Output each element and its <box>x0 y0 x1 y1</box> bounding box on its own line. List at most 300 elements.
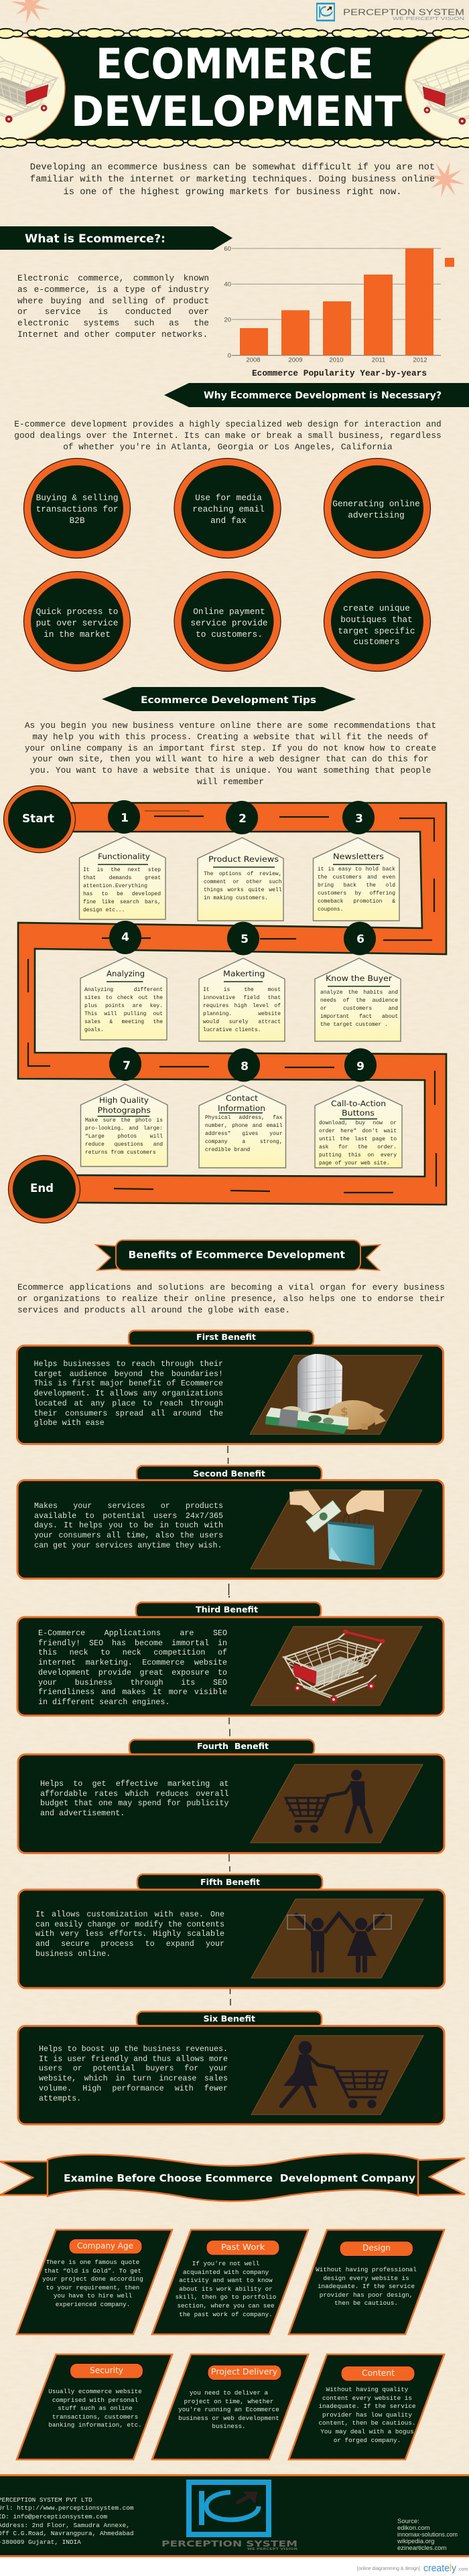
card: Analyzing: plus points are key. <box>84 1003 163 1009</box>
panel: Six Benefit: Helps to boost up the business revenues. <box>39 2044 228 2054</box>
card: Product Reviews: things works quite well <box>204 887 281 893</box>
card: Product Reviews: in making customers. <box>204 895 268 901</box>
pill: Project Delivery: Project Delivery <box>211 2367 277 2376</box>
panel: Fifth Benefit: can easily change or modify the contents <box>36 1920 224 1929</box>
card: Newsletters: it is easy to hold back <box>318 866 395 873</box>
creately credit <box>0 2557 469 2576</box>
icon: shopping cart <box>284 1629 385 1703</box>
pill: Security <box>70 2364 143 2378</box>
connector dashes <box>228 1446 230 2005</box>
panel: First Benefit: located at any place to reach through <box>34 1399 223 1408</box>
card: Newsletters: bring back the old <box>318 883 395 889</box>
x axis labels: 2009 <box>288 357 303 364</box>
panel: Third Benefit: friendly! SEO has become immortal in <box>38 1639 227 1648</box>
step numbers: 5 <box>241 933 249 946</box>
bars <box>240 248 433 356</box>
step numbers: 9 <box>356 1060 364 1073</box>
text: tips intro: will remember <box>197 777 264 787</box>
pill: Design <box>340 2241 413 2257</box>
circle: online payment <box>174 572 281 671</box>
footer contact text <box>0 2496 134 2546</box>
panel: Past Work: activity and want to know <box>179 2277 273 2284</box>
panel: Fourth Benefit: affordable rates which reduces overall <box>40 1789 229 1799</box>
card: Newsletters: coupons. <box>318 907 343 913</box>
panel: Company Age: that “Old is Gold”. To get <box>44 2267 141 2275</box>
decorative star top left <box>7 0 54 28</box>
text: why ecommerce: good dealings over the Internet. Its can make or break a small business, regardless <box>14 431 442 441</box>
card: Makerting: Makerting <box>223 969 265 978</box>
card: Analyzing: sales & meeting the <box>84 1019 163 1025</box>
road path <box>18 803 446 1205</box>
panel: Fifth Benefit: and secure process to expand your <box>36 1939 224 1949</box>
panel: Security: Usually ecommerce website <box>48 2388 142 2395</box>
card: Product Reviews: comment or other such <box>204 879 281 885</box>
panel: Fourth Benefit: Helps to get effective marketing at <box>40 1779 229 1789</box>
step numbers: 1 <box>121 812 129 825</box>
card: Product Reviews <box>198 838 283 921</box>
end node <box>8 1156 80 1223</box>
card: Analyzing: This will pulling out <box>84 1011 163 1017</box>
text: what is ecommerce: Electronic commerce, commonly known <box>17 273 209 283</box>
panel: Company Age: to your requirement, then <box>46 2284 139 2291</box>
text: tips intro: you. You want to have a website that is unique. You want something that people <box>29 765 431 775</box>
card: Call-to-Action Buttons: Call-to-Action <box>331 1099 386 1108</box>
card: Product Reviews: The options of review, <box>204 871 281 877</box>
bar chart: ecommerce popularity <box>224 245 454 378</box>
panel: Company Age: experienced company. <box>56 2301 130 2308</box>
creately credit: creately <box>423 2563 456 2574</box>
title text: DEVELOPMENT <box>71 87 402 136</box>
circle: quick process: Quick process to <box>36 607 118 617</box>
icon: couple with shopping bags <box>287 1914 391 1973</box>
card: Newsletters: Newsletters <box>333 852 384 861</box>
card: Functionality: attention.Everything <box>83 883 147 889</box>
title banner <box>0 29 469 147</box>
panel: six reasons circles <box>24 458 430 671</box>
panel: First Benefit: development. It allows any organizations <box>34 1389 223 1398</box>
panel: Fifth Benefit: It allows customization with ease. One <box>36 1910 224 1919</box>
text: tips intro: your online company is an important first step. If you do not know how to create <box>25 743 436 753</box>
card: Analyzing: Analyzing different <box>84 987 163 993</box>
icon: hands, money and shopping bag <box>289 1491 384 1566</box>
end node: End <box>30 1182 54 1195</box>
cloud strip top <box>0 29 469 38</box>
pill: Content: Content <box>362 2368 395 2378</box>
text: why ecommerce: E-commerce development provides a highly specialized web design for interaction and <box>14 419 442 429</box>
step numbers: 6 <box>356 933 364 946</box>
tab: First Benefit: First Benefit <box>196 1332 256 1342</box>
tab: Second Benefit: Second Benefit <box>193 1468 265 1479</box>
icon: building, piggy bank and money <box>265 1354 386 1434</box>
panel: Second Benefit: days. It helps you to be in touch with <box>34 1521 223 1530</box>
card: Makerting: planning. website <box>203 1011 281 1017</box>
footer sources: ezinearticles.com <box>397 2545 446 2552</box>
card: Makerting: lucrative clients. <box>203 1027 261 1033</box>
panel: Fifth Benefit: business online. <box>36 1949 111 1959</box>
icon: man pushing cart <box>285 1770 371 1833</box>
card: Call-to-Action Buttons <box>315 1085 402 1168</box>
panel: Past Work: acquainted with company <box>183 2269 269 2276</box>
panel: Security: banking information, etc. <box>48 2421 142 2429</box>
x axis labels: 2008 <box>246 357 261 364</box>
intro text: is one of the highest growing markets for business right now. <box>63 187 402 198</box>
card: Functionality <box>79 837 165 919</box>
heading: Ecommerce Development Tips: Ecommerce Development Tips <box>141 695 316 706</box>
circle: buying and selling: Buying & selling <box>36 493 118 503</box>
text: why ecommerce <box>9 419 446 454</box>
text: what is ecommerce: where buying and selling of product <box>17 296 209 306</box>
panel: Second Benefit: your consumers all time, also the users <box>34 1531 223 1540</box>
circle: online payment: to customers. <box>196 629 263 639</box>
card: Know the Buyer: or customers and <box>320 1006 398 1012</box>
panel: Design: design every website is <box>323 2275 409 2282</box>
circle: advertising: advertising <box>348 510 405 520</box>
card: Know the Buyer: needs of the audience <box>320 998 398 1004</box>
panel: Past Work: If you're not well <box>192 2260 259 2267</box>
y axis labels: 0 <box>228 352 231 360</box>
card: Makerting: innovative field that <box>203 995 281 1001</box>
panel: Content: or forged company. <box>334 2437 401 2444</box>
start node <box>4 786 75 853</box>
intro text <box>20 162 445 201</box>
circle: media: and fax <box>210 516 247 526</box>
card: Know the Buyer: analyze the habits and <box>320 990 398 996</box>
tab: Six Benefit <box>137 2012 322 2028</box>
y axis labels: 40 <box>224 281 231 288</box>
card: Newsletters: customers by offering <box>318 891 395 897</box>
panel: Project Delivery: business. <box>212 2423 246 2430</box>
text: tips intro: your own site, then you will want to hire a web designer that can do this for <box>32 754 429 764</box>
creately credit: .com <box>458 2567 468 2572</box>
circle: buying and selling: B2B <box>69 516 85 526</box>
text: tips intro: may help you with this process. Creating a website that will fit the needs of <box>32 732 429 742</box>
pill: Company Age: Company Age <box>77 2241 133 2251</box>
footer contact text: Address: 2nd Floor, Samudra Annexe, <box>0 2522 130 2529</box>
circle: boutiques: customers <box>353 637 400 647</box>
chart: tips road <box>4 786 446 1223</box>
circle: boutiques: boutiques that <box>340 615 413 625</box>
icon: woman pushing cart <box>281 2041 387 2108</box>
card: Contact Information <box>199 1085 285 1168</box>
card: Call-to-Action Buttons: until the last page to <box>319 1136 397 1142</box>
y axis labels: 20 <box>224 316 231 324</box>
text: benefits intro: or organizations to realize their online presence, also helps one to endorse their <box>17 1294 445 1304</box>
card: High Quality Photographs: Photographs <box>98 1106 151 1115</box>
panel: Past Work: the past work of company. <box>179 2311 273 2318</box>
step numbers: 2 <box>239 812 247 826</box>
card: Functionality: Functionality <box>98 852 150 861</box>
text: why ecommerce: of whether you're in Atlanta, Georgia or Los Angeles, California <box>63 442 393 452</box>
card: Analyzing <box>80 958 167 1040</box>
pill: Past Work: Past Work <box>221 2243 265 2252</box>
card: Know the Buyer <box>315 958 401 1041</box>
footer sources: edikon.com <box>397 2524 430 2532</box>
pill: Project Delivery <box>208 2365 281 2380</box>
icon: left cart circle <box>0 36 65 141</box>
logo name: PERCEPTION SYSTEM <box>343 7 464 17</box>
card: Contact Information: Contact <box>226 1093 259 1103</box>
footer sources: wikipedia.org <box>397 2538 434 2545</box>
panel: Content: provider has low quality <box>322 2411 412 2419</box>
circle: media: Use for media <box>195 493 262 503</box>
panel: Company Age: There is one famous quote <box>46 2259 139 2266</box>
panel: First Benefit: their consumers spread all around the <box>34 1409 223 1418</box>
panel: Six Benefit: users or potential buyers for your <box>39 2064 228 2073</box>
x axis labels: 2011 <box>372 357 385 364</box>
card: Functionality: that demands great <box>83 875 161 881</box>
panel: Third Benefit: your business through its SEO <box>38 1678 227 1687</box>
footer contact text: -380009 Gujarat, INDIA <box>0 2539 81 2546</box>
panel: Fifth Benefit <box>19 1874 445 1988</box>
panel: Past Work: skill, then go to portfolio <box>176 2293 276 2301</box>
card: Analyzing: Analyzing <box>107 969 145 978</box>
panel: First Benefit: target audience beyond the boundaries! <box>34 1369 223 1379</box>
pill: Content <box>341 2366 415 2381</box>
tab: Fifth Benefit <box>137 1874 322 1890</box>
heading ribbon: Examine Before Choose Ecommerce Development Company: Examine Before Choose Ecommerce Development Company <box>64 2172 415 2184</box>
heading: Ecommerce Development Tips <box>102 687 356 711</box>
circle: quick process <box>24 572 130 671</box>
card: Functionality: fine like search bars, <box>83 899 161 905</box>
top logo: Perception System <box>317 3 464 21</box>
panel: Second Benefit <box>17 1466 444 1579</box>
circle: quick process: put over service <box>36 618 118 628</box>
card: Contact Information: company a strong, <box>205 1139 283 1145</box>
text: what is ecommerce: as e-commerce, is a type of industry <box>17 285 209 295</box>
icon: right cart circle <box>405 36 469 141</box>
text: tips intro <box>16 721 445 790</box>
panel: Security: stuff such as online <box>58 2405 133 2412</box>
panel: Fourth Benefit <box>18 1740 444 1853</box>
title text: ECOMMERCE <box>96 40 374 88</box>
tab: Fourth Benefit: Fourth Benefit <box>197 1741 269 1751</box>
circle: online payment: service provide <box>190 618 268 628</box>
text: what is ecommerce: electronic systems such as the <box>17 318 209 328</box>
panel: Company Age: your project done according <box>42 2275 143 2283</box>
heading: Why Ecommerce Development is Necessary <box>164 383 469 407</box>
panel: Third Benefit: development provide great exposure to <box>38 1668 227 1677</box>
card: High Quality Photographs: High Quality <box>99 1095 149 1105</box>
panel: First Benefit <box>17 1331 444 1444</box>
text: tips intro: As you begin you new business venture online there are some recommendations that <box>25 721 436 731</box>
card: Call-to-Action Buttons: page of your web site. <box>319 1160 390 1166</box>
panel: Third Benefit: internet marketing. Ecommerce website <box>38 1658 227 1667</box>
card: Makerting <box>199 958 285 1041</box>
panel: Project Delivery <box>152 2354 308 2459</box>
panel: Security <box>17 2354 172 2459</box>
panel: First Benefit: This is first major benefit of Ecommerce <box>34 1379 223 1388</box>
text: what is ecommerce: or service is conducted over <box>17 307 209 317</box>
card: High Quality Photographs: “Large photos will <box>85 1134 163 1140</box>
card: Functionality: has to be developed <box>83 891 161 897</box>
footer contact text: Url: http://www.perceptionsystem.com <box>0 2504 134 2512</box>
panel: Design: then be cautious. <box>334 2299 398 2307</box>
x axis labels: 2012 <box>413 357 427 364</box>
tab: Fifth Benefit: Fifth Benefit <box>200 1877 260 1887</box>
step numbers: 7 <box>123 1059 131 1073</box>
text: what is ecommerce: Internet and other computer networks. <box>17 329 208 339</box>
chart caption: Ecommerce Popularity Year-by-years <box>252 368 427 378</box>
pill: Design: Design <box>362 2243 391 2253</box>
card: Know the Buyer: Know the Buyer <box>326 974 392 983</box>
card: Contact Information: Physical address, fax <box>205 1115 283 1121</box>
x axis labels <box>246 357 427 364</box>
card: Analyzing: sites to check out the <box>84 995 163 1001</box>
card: Contact Information: Information <box>218 1104 265 1113</box>
cloud strip bottom <box>0 138 469 147</box>
heading: Benefits of Ecommerce Development <box>96 1240 380 1270</box>
card: Functionality: It is the next step <box>83 867 161 873</box>
card: Newsletters <box>314 838 399 921</box>
footer sources: Source: <box>397 2518 419 2525</box>
panel: Content <box>289 2354 444 2459</box>
circle: advertising <box>324 458 430 558</box>
footer contact text: ID: info@perceptionsystem.com <box>0 2513 108 2520</box>
panel: Second Benefit: available to potential users 24x7/365 <box>34 1511 223 1521</box>
panel: Security: comprised with personal <box>52 2397 138 2404</box>
panel: Six Benefit: It is user friendly and thus allows more <box>39 2054 228 2064</box>
footer logo: WE PERCEPT VISION <box>247 2547 297 2551</box>
panel: Design <box>289 2230 444 2334</box>
heading: Why Ecommerce Development is Necessary: Why Ecommerce Development is Necessary? <box>204 390 442 401</box>
card: Makerting: would surely attract <box>203 1019 281 1025</box>
decorative star right of intro <box>421 157 469 202</box>
panel: Third Benefit: friendliness and makes it more visible <box>38 1687 227 1697</box>
card: High Quality Photographs: pro-looking… and large: <box>85 1126 163 1132</box>
panel: Past Work <box>152 2230 308 2334</box>
circle: boutiques: target specific <box>338 626 415 636</box>
card: Know the Buyer: the target customer . <box>320 1022 388 1028</box>
tab: Fourth Benefit <box>129 1740 314 1756</box>
panel: Six Benefit <box>18 2012 444 2124</box>
card: Newsletters: comeback promotion & <box>318 899 395 905</box>
card: Call-to-Action Buttons: order here" don't wait <box>319 1128 397 1134</box>
creately credit: [online diagramming & design] <box>357 2565 420 2571</box>
circle: online payment: Online payment <box>193 607 265 617</box>
intro text: familiar with the internet or marketing techniques. Doing business online <box>30 175 435 185</box>
panel: Six Benefit: attempts. <box>39 2094 81 2103</box>
tab: First Benefit <box>129 1331 314 1347</box>
heading: What is Ecommerce <box>0 226 232 250</box>
panel: Past Work: section, where you can see <box>177 2302 275 2309</box>
panel: Six Benefit: volume. High performance with fewer <box>39 2084 228 2093</box>
circle: buying and selling <box>24 458 130 558</box>
y axis labels <box>224 245 231 360</box>
tab: Third Benefit <box>136 1602 321 1618</box>
step numbers <box>108 800 377 1082</box>
footer sources <box>397 2518 458 2552</box>
panel: Fourth Benefit: and advertisement. <box>40 1809 125 1818</box>
circle: boutiques: create unique <box>343 603 410 613</box>
panel: Past Work: about its work ability or <box>179 2285 273 2293</box>
card: High Quality Photographs: Make sure the photo is <box>85 1118 163 1124</box>
footer sources: innomax-solutions.com <box>397 2531 458 2539</box>
text: what is ecommerce <box>17 273 209 343</box>
card: Makerting: It is the most <box>203 987 281 993</box>
panel: Content: content, then be cautious. <box>318 2419 416 2427</box>
panel: Design: provider has poor design, <box>320 2291 413 2299</box>
footer contact text: PERCEPTION SYSTEM PVT LTD <box>0 2496 92 2504</box>
footer <box>0 2474 469 2557</box>
card: High Quality Photographs: reduce questions and <box>85 1142 163 1148</box>
card: High Quality Photographs <box>80 1084 168 1166</box>
card: High Quality Photographs: returns from customers <box>85 1150 156 1156</box>
text: benefits intro: services and products all around the globe with ease. <box>17 1305 290 1315</box>
step numbers: 4 <box>121 931 129 944</box>
tab: Second Benefit <box>137 1466 322 1482</box>
panel: Content: You may deal with a bogus <box>320 2428 414 2435</box>
circle: media: reaching email <box>192 504 265 514</box>
panel: Third Benefit: in different search engines. <box>38 1697 170 1707</box>
card: Product Reviews: Product Reviews <box>208 854 279 864</box>
legend swatch <box>445 258 454 267</box>
pill: Past Work <box>206 2241 279 2255</box>
tab: Six Benefit: Six Benefit <box>204 2014 255 2024</box>
panel: Company Age: you have to hire well <box>54 2292 132 2299</box>
card: Analyzing: goals. <box>84 1027 104 1033</box>
panel: Security: transactions, customers <box>52 2413 138 2421</box>
panel: First Benefit: Helps businesses to reach through their <box>34 1359 223 1369</box>
panel: Design: inadequate. If the service <box>318 2283 415 2290</box>
icon: logo mark <box>317 3 334 21</box>
card: Call-to-Action Buttons: ask for the order. <box>319 1144 397 1150</box>
circle: quick process: in the market <box>44 629 111 639</box>
circle: advertising: Generating online <box>332 499 420 509</box>
panel: Project Delivery: business or web development <box>178 2415 279 2422</box>
panel: Project Delivery: you need to deliver a <box>190 2389 268 2397</box>
panel: Second Benefit: can get your services anytime they wish. <box>34 1541 222 1550</box>
panel: Third Benefit: E-Commerce Applications are SEO <box>38 1628 227 1638</box>
heading: What is Ecommerce: What is Ecommerce?: <box>25 232 165 246</box>
panel: Design: Without having professional <box>316 2266 417 2273</box>
title text <box>71 40 402 136</box>
text: benefits intro <box>17 1282 445 1317</box>
panel: Company Age <box>17 2230 172 2334</box>
footer logo: PERCEPTION SYSTEM <box>161 2539 297 2549</box>
y axis labels: 60 <box>224 245 231 253</box>
card: Makerting: requires high level of <box>203 1003 281 1009</box>
heading: Benefits of Ecommerce Development: Benefits of Ecommerce Development <box>129 1249 346 1261</box>
circle: buying and selling: transactions for <box>36 504 118 514</box>
footer logo <box>161 2482 297 2551</box>
step numbers: 8 <box>241 1060 249 1073</box>
tab: Third Benefit: Third Benefit <box>196 1604 258 1614</box>
card: Contact Information: credible brand <box>205 1147 250 1153</box>
card: Call-to-Action Buttons: download, buy now or <box>319 1120 397 1126</box>
panel: Content: Without having quality <box>326 2386 408 2393</box>
card: Contact Information: number, phone and email <box>205 1123 283 1129</box>
panel: Content: inadequate. If the service <box>318 2403 416 2410</box>
panel: Fourth Benefit: budget that one may spend for publicity <box>40 1799 229 1808</box>
card: Call-to-Action Buttons: Buttons <box>342 1108 375 1118</box>
card: Functionality: design etc... <box>83 907 125 913</box>
panel: First Benefit: globe with ease <box>34 1418 105 1428</box>
panel: Content: content every website is <box>322 2395 412 2402</box>
intro text: Developing an ecommerce business can be somewhat difficult if you are not <box>30 163 435 173</box>
pill: Security: Security <box>90 2366 123 2375</box>
panel: Project Delivery: you're running an Ecommerce <box>178 2406 279 2413</box>
pill: Company Age <box>69 2239 142 2254</box>
text: benefits intro: Ecommerce applications and solutions are becoming a vital organ for every business <box>17 1282 445 1292</box>
card: Call-to-Action Buttons: putting this on every <box>319 1152 397 1158</box>
footer contact text: Off C.G.Road, Navrangpura, Ahmedabad <box>0 2530 134 2537</box>
step numbers: 3 <box>355 812 363 826</box>
card: Newsletters: the customers and even <box>318 875 395 881</box>
card: Know the Buyer: important fact about <box>320 1014 398 1020</box>
panel: Second Benefit: Makes your services or products <box>34 1501 223 1511</box>
panel: Six Benefit: website, which in turn increase sales <box>39 2074 228 2083</box>
circle: boutiques <box>324 572 430 671</box>
